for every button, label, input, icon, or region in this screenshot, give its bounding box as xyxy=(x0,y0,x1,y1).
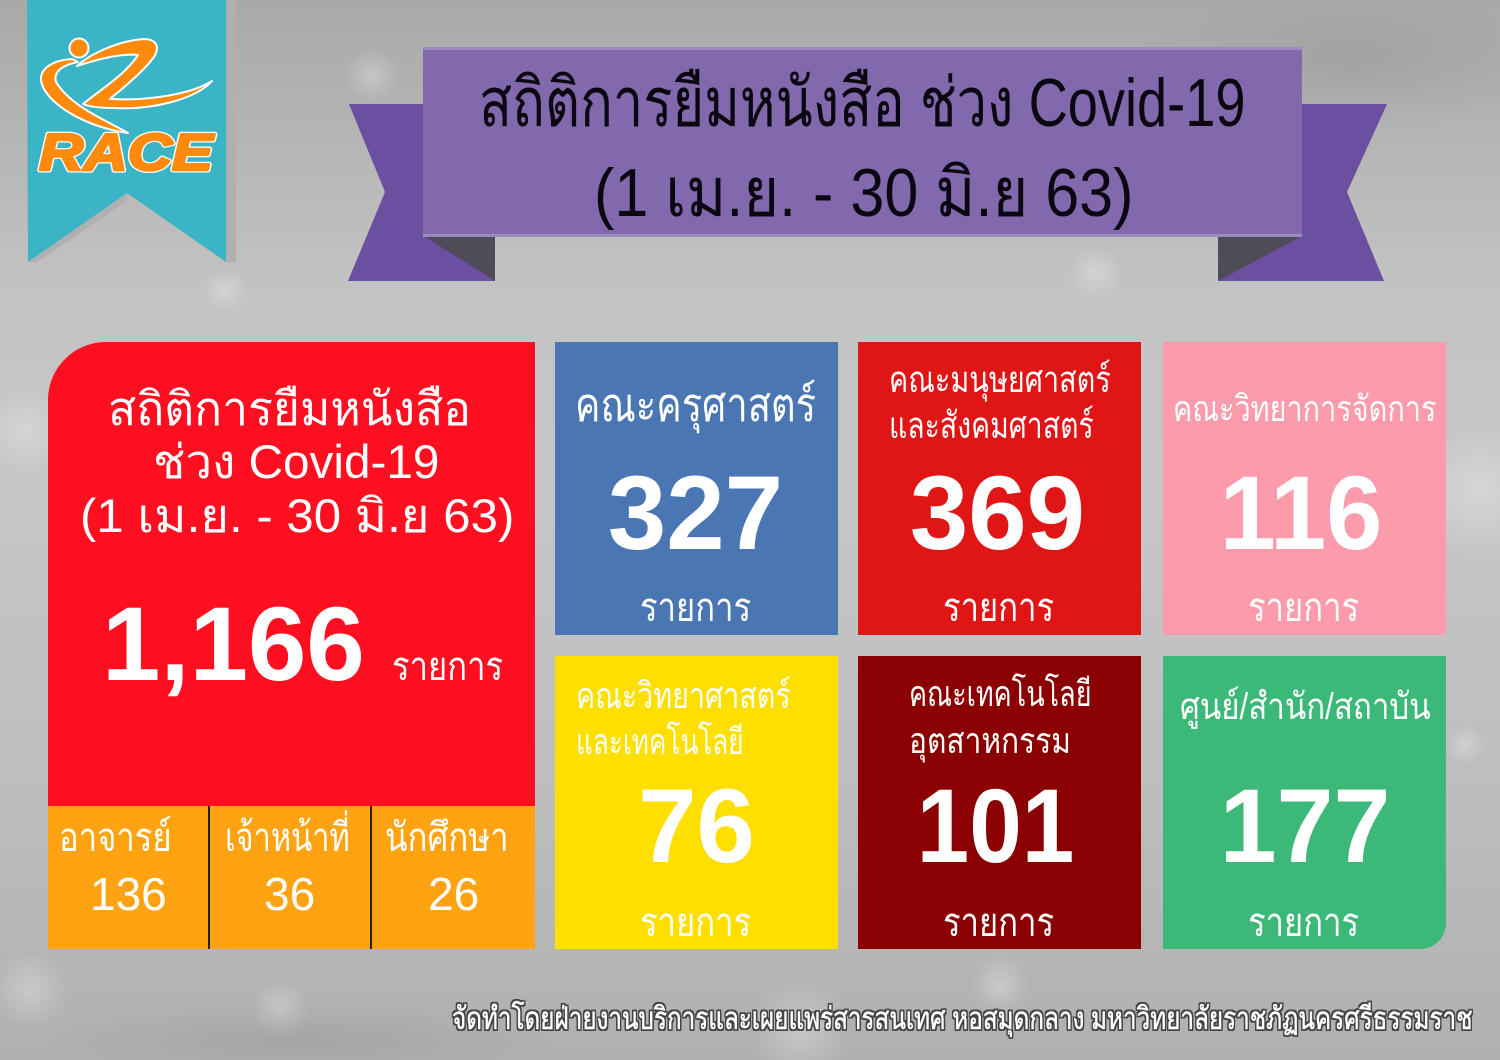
count: 101 xyxy=(917,768,1074,885)
count: 76 xyxy=(638,768,755,885)
logo word: RACE xyxy=(39,124,215,182)
logo word: RACE xyxy=(39,124,215,182)
panel: industrial technology xyxy=(858,656,1141,949)
total heading line 3: (1 เม.ย. - 30 มิ.ย 63) xyxy=(80,489,514,542)
panel: management xyxy=(1163,342,1446,635)
panel: science xyxy=(555,656,838,949)
students: นักศึกษา xyxy=(385,816,509,860)
faculty name: คณะมนุษยศาสตร์ xyxy=(889,359,1111,400)
footer credit: จัดทำโดยฝ่ายงานบริการและเผยแพร่สารสนเทศ หอสมุดกลาง มหาวิทยาลัยราชภัฏนครศรีธรรมราช xyxy=(452,1001,1473,1036)
logo swoosh xyxy=(41,38,212,133)
students: 26 xyxy=(428,868,479,920)
ribbon xyxy=(27,0,226,262)
faculty name line 2: และเทคโนโลยี xyxy=(576,721,744,762)
left ribbon tail xyxy=(348,104,495,281)
lecturers xyxy=(48,806,210,949)
unit: รายการ xyxy=(943,586,1054,630)
title line 2: (1 เม.ย. - 30 มิ.ย 63) xyxy=(594,155,1133,231)
title banner xyxy=(348,47,1387,281)
unit: รายการ xyxy=(1248,586,1359,630)
students xyxy=(385,816,509,920)
unit: รายการ xyxy=(640,901,751,945)
staff: เจ้าหน้าที่ xyxy=(225,816,350,860)
total number: 1,166 xyxy=(102,586,365,703)
fold shadows xyxy=(424,236,495,281)
unit: รายการ xyxy=(640,586,751,630)
count: 177 xyxy=(1220,768,1390,885)
faculty name line 2: อุตสาหกรรม xyxy=(909,720,1071,761)
unit name: ศูนย์/สำนัก/สถาบัน xyxy=(1180,686,1431,727)
right ribbon tail xyxy=(1218,104,1387,281)
faculty name: คณะครุศาสตร์ xyxy=(575,378,816,431)
bookmark ribbon with RACE logo xyxy=(27,0,236,262)
ribbon shadow xyxy=(28,0,236,262)
panel: centers and institutes xyxy=(1163,656,1446,949)
faculty name line 2: และสังคมศาสตร์ xyxy=(889,405,1094,446)
lecturers: 136 xyxy=(90,868,167,920)
count: 327 xyxy=(608,455,783,572)
faculty name: คณะเทคโนโลยี xyxy=(909,673,1092,714)
total heading line 1: สถิติการยืมหนังสือ xyxy=(108,382,471,435)
panel: education xyxy=(555,342,838,635)
count: 116 xyxy=(1220,455,1382,572)
banner body xyxy=(423,48,1302,236)
total unit: รายการ xyxy=(392,645,503,689)
faculty name: คณะวิทยาศาสตร์ xyxy=(576,675,791,716)
panel: humanities xyxy=(858,342,1141,635)
panel: total xyxy=(48,342,535,949)
staff: 36 xyxy=(264,868,315,920)
lecturers: อาจารย์ xyxy=(59,816,172,860)
faculty name: คณะวิทยาการจัดการ xyxy=(1173,388,1436,429)
total heading line 2: ช่วง Covid-19 xyxy=(153,435,439,488)
unit: รายการ xyxy=(943,901,1054,945)
unit: รายการ xyxy=(1248,901,1359,945)
title line 1: สถิติการยืมหนังสือ ช่วง Covid-19 xyxy=(479,65,1245,141)
staff xyxy=(210,806,372,949)
count: 369 xyxy=(910,455,1085,572)
sub-panel: staff breakdown xyxy=(48,806,535,949)
